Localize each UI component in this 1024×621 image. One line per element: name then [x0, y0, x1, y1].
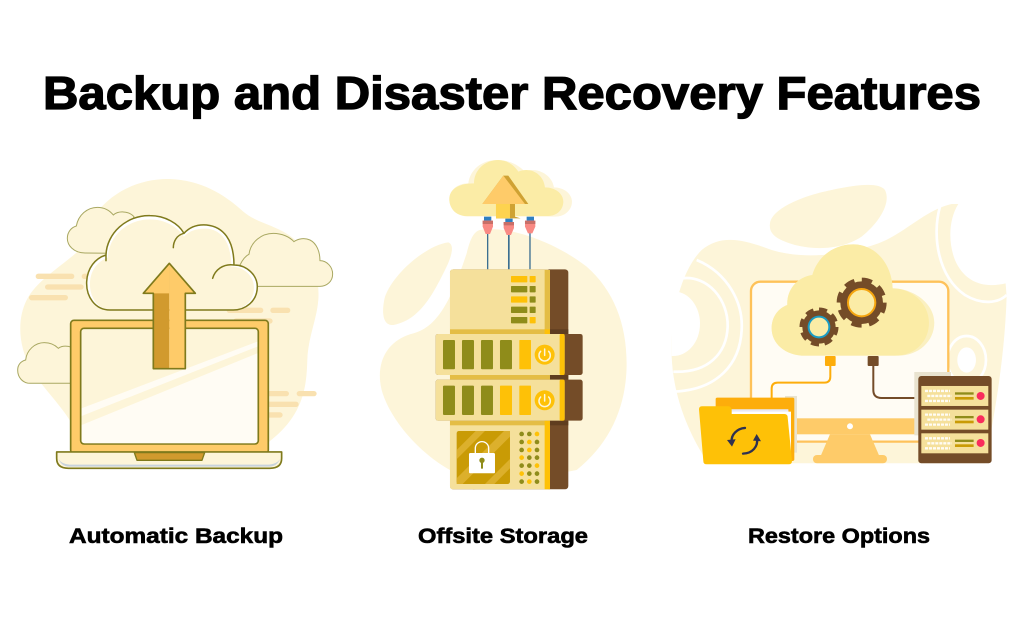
gear small — [802, 310, 836, 344]
cloud: right — [240, 233, 333, 286]
cable to server — [868, 356, 920, 398]
indicator dots — [519, 432, 539, 484]
panel: restore options illustration — [672, 185, 1007, 464]
gear large — [839, 280, 884, 325]
panel: automatic backup illustration — [18, 179, 333, 468]
background blob — [380, 229, 627, 490]
laptop base — [57, 452, 282, 468]
cloud: lower left — [18, 343, 72, 383]
cable to folder — [772, 356, 836, 398]
main cloud — [87, 216, 257, 310]
cloud with arrow — [449, 160, 572, 218]
title: Backup and Disaster Recovery Features — [43, 67, 981, 119]
server tower — [436, 269, 583, 489]
server rack — [914, 372, 992, 463]
tower strips between units — [450, 375, 550, 380]
background contour lines — [673, 207, 1007, 392]
network plugs and cables — [483, 217, 535, 269]
label: automatic backup: Automatic Backup — [69, 525, 283, 548]
label: offsite storage: Offsite Storage — [418, 525, 588, 548]
folder — [699, 396, 797, 464]
laptop screen — [81, 328, 258, 444]
arrow — [482, 176, 528, 218]
background blob — [672, 204, 1007, 463]
panel: offsite storage illustration — [380, 160, 627, 490]
cloud with gears — [772, 244, 934, 356]
laptop — [57, 320, 282, 468]
upload arrow — [143, 263, 195, 369]
tower top unit — [450, 269, 568, 489]
background blob — [20, 179, 319, 447]
cloud: upper left — [67, 207, 134, 253]
background blob: top — [770, 185, 887, 248]
speed lines — [29, 274, 317, 418]
label: restore options: Restore Options — [748, 525, 930, 548]
background blob: small leaf — [383, 242, 452, 325]
middle unit 1 — [436, 334, 583, 375]
laptop lid — [71, 320, 268, 454]
middle unit 2 — [436, 380, 583, 421]
lock panel — [457, 431, 510, 484]
monitor — [751, 282, 948, 463]
sync arrows — [732, 428, 757, 454]
